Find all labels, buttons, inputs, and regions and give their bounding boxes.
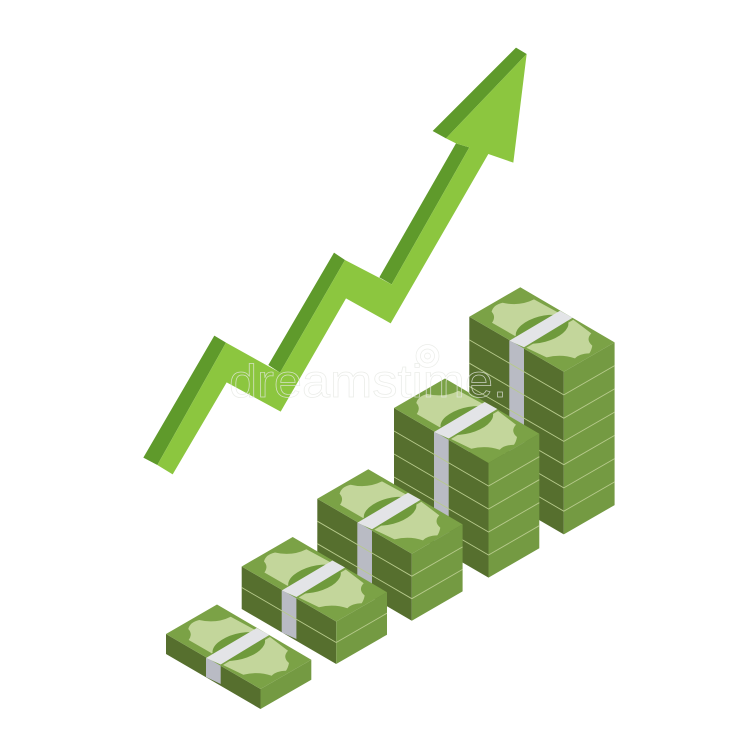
watermark wordmark: dreamstime. <box>229 355 507 407</box>
arrow light face <box>157 54 527 474</box>
stack of money: seven bundles <box>469 287 615 534</box>
watermark logo spiral <box>416 344 439 368</box>
arrow shaft dark side, first segment <box>143 336 226 465</box>
watermark <box>229 344 507 407</box>
arrow shaft dark side, third segment <box>379 143 469 284</box>
stack of money: two bundles <box>242 537 387 664</box>
arrow shaft dark side, second segment <box>268 253 345 373</box>
stack of money: five bundles <box>394 378 539 578</box>
stack of money: three bundles <box>317 469 463 621</box>
arrow: rising zigzag green arrow <box>143 48 527 474</box>
stack of money: single bundle <box>166 604 311 709</box>
arrow head dark side <box>433 48 527 138</box>
